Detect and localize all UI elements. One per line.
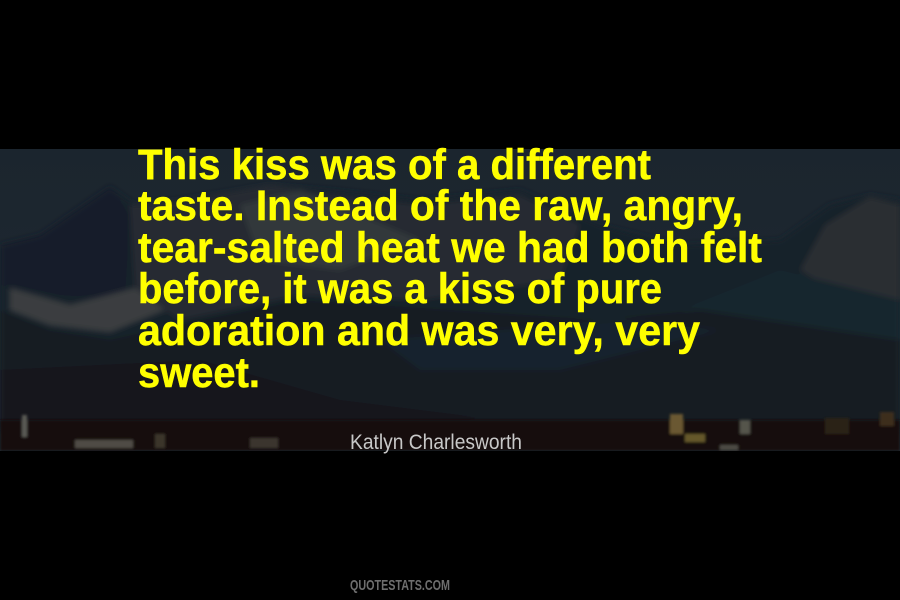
quote text: taste. Instead of the raw, angry,: [138, 182, 743, 230]
town lights: [0, 412, 900, 451]
watermark: QUOTESTATS.COM: [350, 577, 450, 594]
author name: Katlyn Charlesworth: [350, 431, 522, 454]
photo band: mountains and town: [0, 149, 900, 451]
quote text: [138, 141, 762, 397]
quote text: before, it was a kiss of pure: [138, 265, 662, 313]
quote text: This kiss was of a different: [138, 141, 651, 189]
quote text: tear-salted heat we had both felt: [138, 224, 762, 272]
quote text: sweet.: [138, 349, 260, 397]
quote text: adoration and was very, very: [138, 307, 700, 355]
